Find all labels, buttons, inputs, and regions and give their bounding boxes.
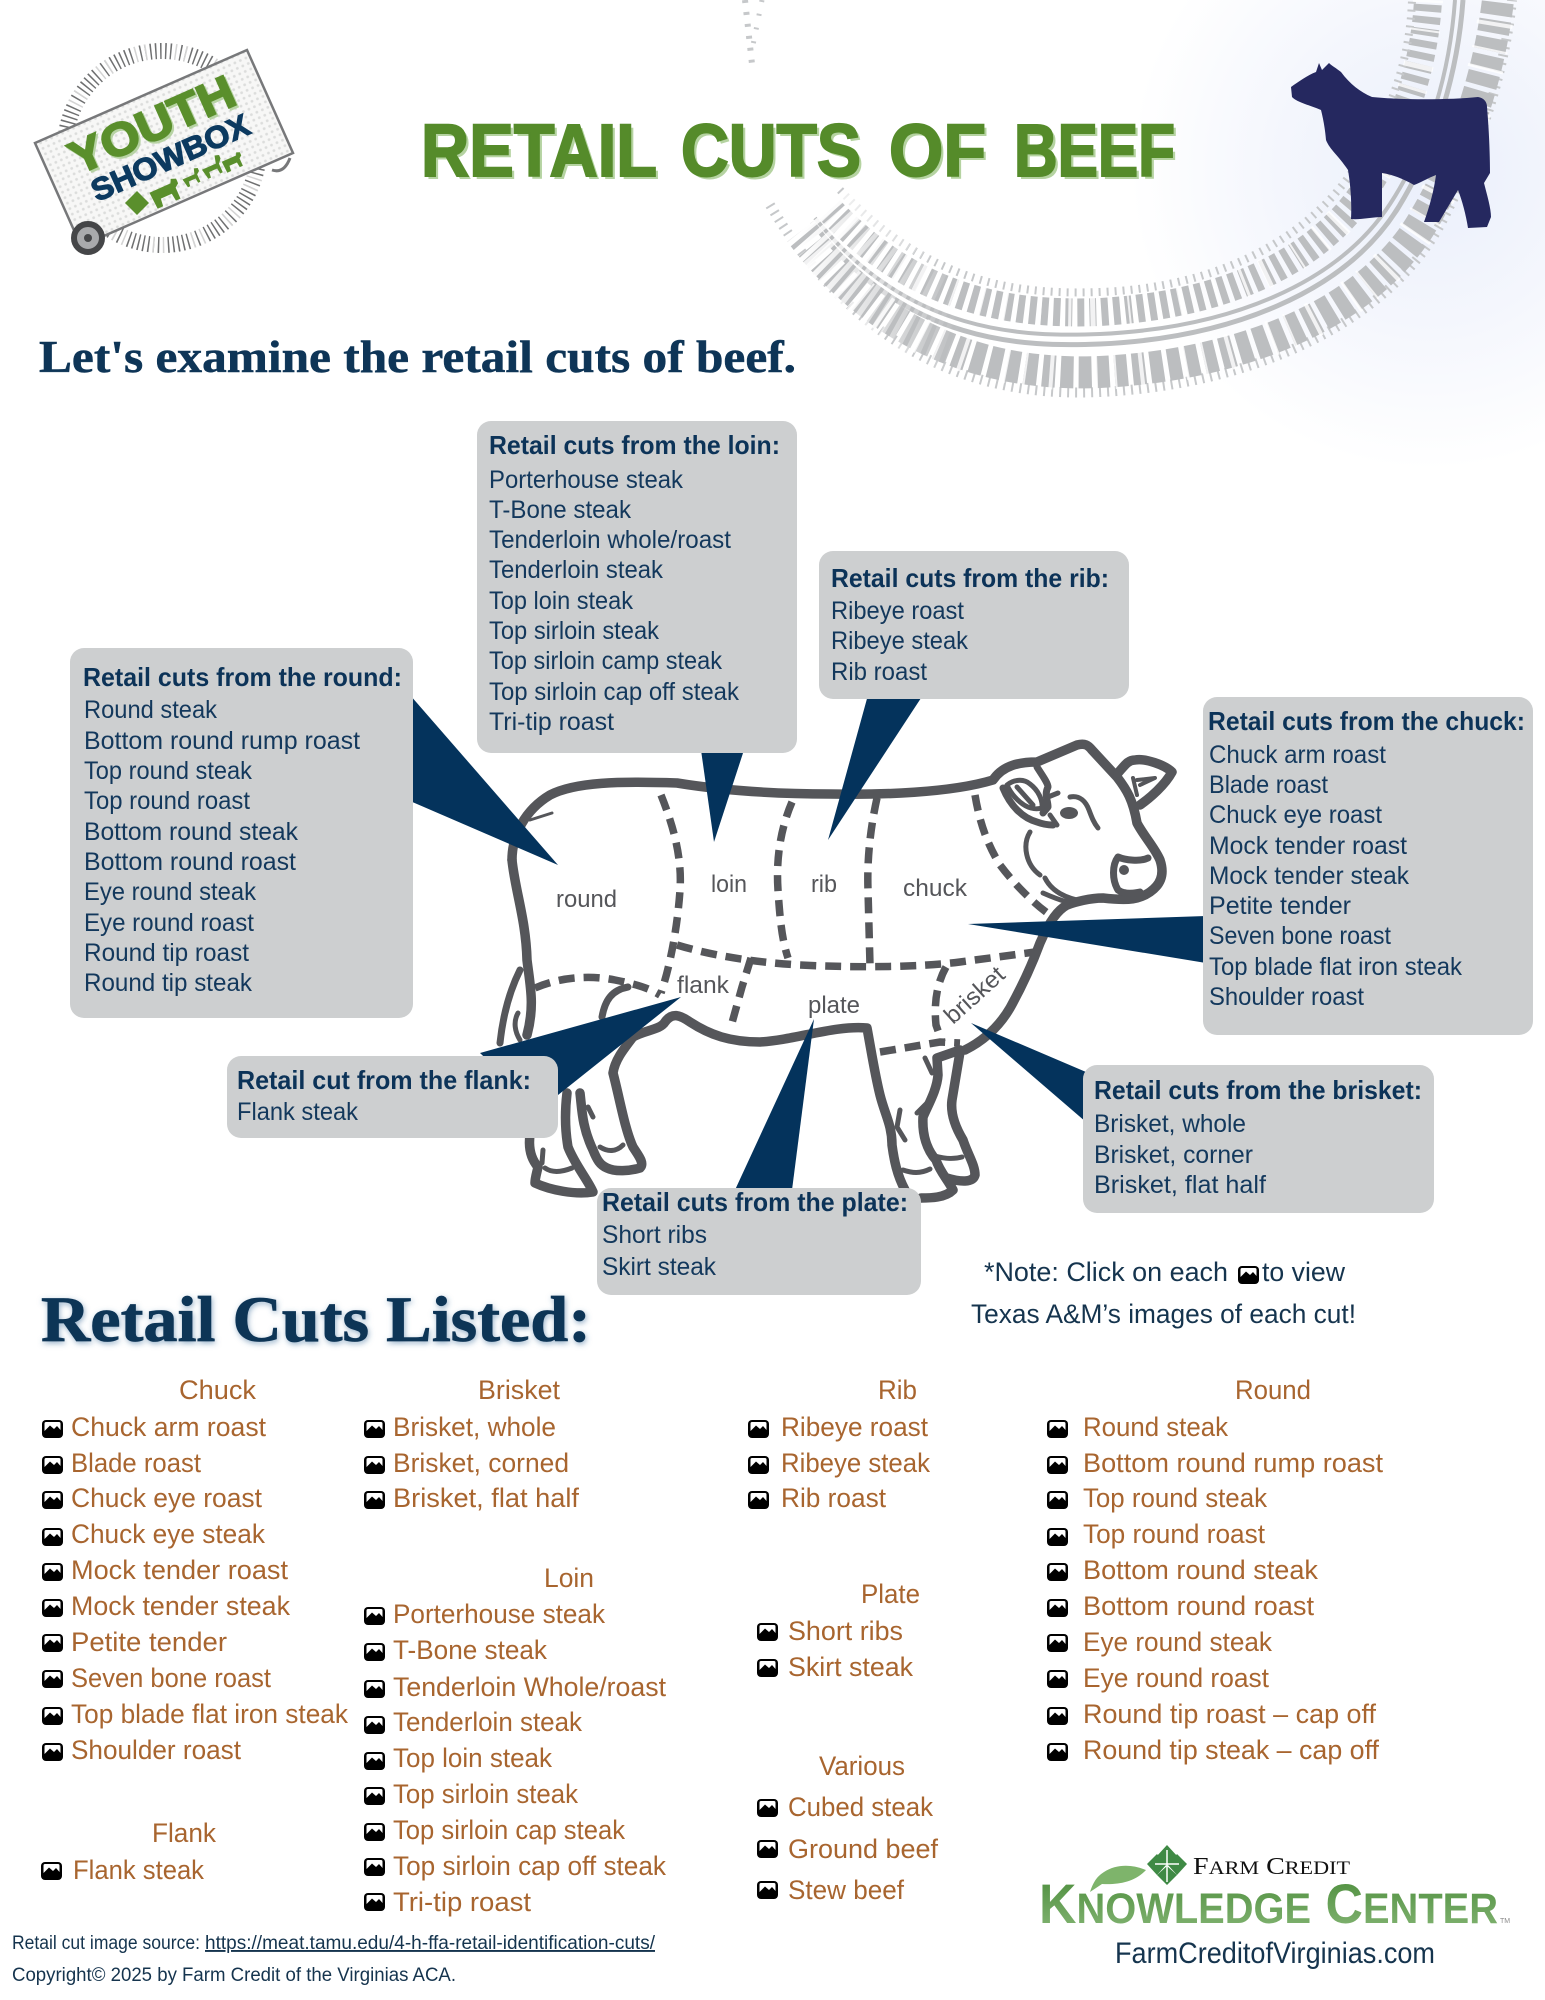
tire track bbox=[745, 0, 1512, 392]
title: OF bbox=[892, 112, 989, 195]
list: Loin: Tenderloin steak bbox=[393, 1707, 582, 1737]
pointer: chuck bbox=[968, 916, 1206, 963]
list: Rib: Ribeye steak bbox=[781, 1448, 930, 1478]
list: Rib bbox=[748, 1375, 930, 1513]
cut labels on the cow bbox=[556, 871, 1011, 1029]
panel: round: Bottom round steak bbox=[84, 818, 298, 846]
panel: loin: Top sirloin steak bbox=[489, 617, 659, 645]
pointer: round bbox=[410, 695, 558, 865]
title: CUTS bbox=[681, 109, 861, 192]
logo: Youth Showbox: SHOWBOX bbox=[86, 107, 255, 208]
pointer: rib bbox=[828, 695, 923, 840]
list: Chuck: Mock tender roast bbox=[71, 1555, 288, 1585]
icon: steer silhouette bbox=[1291, 63, 1491, 228]
logo: Youth Showbox: YOUTH bbox=[63, 67, 245, 186]
list: Round: Round steak bbox=[1083, 1412, 1228, 1442]
list: Chuck: Mock tender steak bbox=[71, 1591, 290, 1621]
list: Brisket: Brisket bbox=[478, 1375, 560, 1405]
panel: chuck: Shoulder roast bbox=[1209, 983, 1364, 1011]
panel: plate bbox=[597, 1187, 921, 1295]
panel: loin bbox=[477, 421, 797, 753]
heading: Retail Cuts Listed: Retail Cuts Listed: bbox=[41, 1284, 591, 1356]
panel: round: Round tip roast bbox=[84, 939, 249, 967]
list: Round: Eye round steak bbox=[1083, 1627, 1272, 1657]
cut labels on the cow: chuck bbox=[903, 875, 968, 902]
list: Chuck: Petite tender bbox=[71, 1627, 227, 1657]
logo: Farm Credit Knowledge Center: FARM CREDIT bbox=[1193, 1854, 1350, 1880]
list: Chuck bbox=[42, 1375, 348, 1765]
footer: source and copyright bbox=[12, 1933, 656, 1986]
logo: Farm Credit Knowledge Center: KNOWLEDGE CENTER bbox=[1039, 1872, 1498, 1935]
panel: loin: Top sirloin camp steak bbox=[489, 647, 722, 675]
panel: rib: Ribeye steak bbox=[831, 627, 968, 655]
title: OF bbox=[889, 109, 986, 192]
cut labels on the cow: rib bbox=[811, 871, 837, 898]
list: Loin: Top sirloin cap off steak bbox=[393, 1851, 666, 1881]
panel: flank: Flank steak bbox=[237, 1098, 358, 1126]
panel: chuck: Top blade flat iron steak bbox=[1209, 953, 1462, 981]
list: Chuck: Chuck bbox=[179, 1375, 257, 1405]
panel: round bbox=[70, 648, 413, 1018]
list: Rib: Rib roast bbox=[781, 1483, 886, 1513]
panel: round: Bottom round rump roast bbox=[84, 727, 360, 755]
cow diagram bbox=[500, 744, 1172, 1198]
panel: rib: Rib roast bbox=[831, 658, 927, 686]
list: Chuck: Chuck eye steak bbox=[71, 1519, 265, 1549]
panel: brisket: Brisket, whole bbox=[1094, 1110, 1246, 1138]
pointer: brisket bbox=[971, 1023, 1086, 1122]
list: Rib: Rib bbox=[878, 1375, 917, 1405]
logo: Farm Credit Knowledge Center: FarmCreditofVirginias.com bbox=[1115, 1937, 1435, 1970]
note bbox=[971, 1257, 1356, 1329]
panel: round: Top round roast bbox=[84, 787, 250, 815]
panel: loin: Porterhouse steak bbox=[489, 466, 683, 494]
logo: Farm Credit Knowledge Center bbox=[1039, 1845, 1510, 1970]
list: Brisket bbox=[364, 1375, 579, 1513]
list: Loin: Top sirloin cap steak bbox=[393, 1815, 625, 1845]
list: Brisket: Brisket, corned bbox=[393, 1448, 569, 1478]
list: Round: Round tip roast – cap off bbox=[1083, 1699, 1376, 1729]
panel: flank bbox=[227, 1056, 558, 1138]
list: Round: Bottom round roast bbox=[1083, 1591, 1314, 1621]
cut labels on the cow: loin bbox=[711, 871, 747, 898]
panel: chuck: Chuck arm roast bbox=[1209, 741, 1386, 769]
list: Round: Bottom round rump roast bbox=[1083, 1448, 1383, 1478]
footer: source and copyright: Copyright© 2025 by Farm Credit of the Virginias ACA. bbox=[12, 1965, 456, 1986]
panel: loin: Tenderloin whole/roast bbox=[489, 526, 731, 554]
panel: round: Eye round steak bbox=[84, 878, 256, 906]
list: Loin: Loin bbox=[544, 1563, 594, 1593]
panel: round: Round tip steak bbox=[84, 969, 252, 997]
pointer: plate bbox=[735, 1019, 814, 1190]
panel: rib: Ribeye roast bbox=[831, 597, 964, 625]
list: Various: Stew beef bbox=[788, 1875, 904, 1905]
panel: loin: Tri-tip roast bbox=[489, 708, 614, 736]
list: Chuck: Seven bone roast bbox=[71, 1663, 271, 1693]
subtitle: Let's examine the retail cuts of beef. bbox=[39, 332, 796, 382]
panel: round: Round steak bbox=[84, 696, 217, 724]
panel: chuck: Mock tender roast bbox=[1209, 832, 1407, 860]
title: BEEF bbox=[1014, 109, 1175, 192]
panel: round: Eye round roast bbox=[84, 909, 254, 937]
logo: Youth Showbox bbox=[35, 50, 293, 252]
list: Round: Top round steak bbox=[1083, 1483, 1267, 1513]
list: Loin: Porterhouse steak bbox=[393, 1599, 605, 1629]
list: Round bbox=[1047, 1375, 1383, 1765]
panel: chuck: Blade roast bbox=[1209, 771, 1328, 799]
panel: loin: Top sirloin cap off steak bbox=[489, 678, 739, 706]
title bbox=[421, 109, 1178, 195]
panel: brisket: Brisket, flat half bbox=[1094, 1171, 1266, 1199]
panel: round: Top round steak bbox=[84, 757, 252, 785]
logo: Farm Credit Knowledge Center: TM bbox=[1500, 1918, 1510, 1925]
panel: round: Retail cuts from the round: bbox=[83, 662, 402, 692]
panel: brisket: Brisket, corner bbox=[1094, 1141, 1253, 1169]
list: Flank: Flank steak bbox=[73, 1855, 204, 1885]
panel: brisket bbox=[1083, 1065, 1434, 1213]
list: Various: Various bbox=[819, 1751, 905, 1781]
list: Loin: Top loin steak bbox=[393, 1743, 552, 1773]
list: Round: Eye round roast bbox=[1083, 1663, 1269, 1693]
panel: chuck: Mock tender steak bbox=[1209, 862, 1409, 890]
cut labels on the cow: round bbox=[556, 886, 617, 913]
list: Loin bbox=[364, 1563, 666, 1917]
list: Various: Cubed steak bbox=[788, 1792, 933, 1822]
list: Loin: Top sirloin steak bbox=[393, 1779, 578, 1809]
list: Brisket: Brisket, flat half bbox=[393, 1483, 579, 1513]
list: Chuck: Shoulder roast bbox=[71, 1735, 241, 1765]
pointer: flank bbox=[480, 997, 681, 1110]
panel: loin: Tenderloin steak bbox=[489, 556, 663, 584]
panel: chuck: Petite tender bbox=[1209, 892, 1351, 920]
cut labels on the cow: brisket bbox=[939, 961, 1011, 1029]
panel: loin: Retail cuts from the loin: bbox=[489, 430, 780, 460]
logo: Youth Showbox: YOUTH bbox=[61, 65, 243, 184]
list: Plate bbox=[757, 1579, 920, 1682]
list: Loin: Tenderloin Whole/roast bbox=[393, 1672, 666, 1702]
list: Various bbox=[757, 1751, 938, 1905]
list: Plate: Skirt steak bbox=[788, 1652, 913, 1682]
list: Plate: Plate bbox=[861, 1579, 920, 1609]
background glow bbox=[1000, 0, 1545, 500]
list: Chuck: Chuck arm roast bbox=[71, 1412, 266, 1442]
panel: plate: Retail cuts from the plate: bbox=[602, 1187, 908, 1217]
list: Round: Bottom round steak bbox=[1083, 1555, 1318, 1585]
panel: flank: Retail cut from the flank: bbox=[237, 1065, 531, 1095]
title: RETAIL bbox=[421, 109, 657, 192]
note: Texas A&M’s images of each cut! bbox=[971, 1299, 1356, 1329]
list: Flank: Flank bbox=[152, 1818, 216, 1848]
panel: plate: Short ribs bbox=[602, 1221, 707, 1249]
panel: brisket: Retail cuts from the brisket: bbox=[1094, 1075, 1422, 1105]
list: Flank bbox=[41, 1818, 216, 1885]
panel: chuck bbox=[1203, 697, 1533, 1035]
panel: chuck: Retail cuts from the chuck: bbox=[1208, 706, 1525, 736]
list: Chuck: Top blade flat iron steak bbox=[71, 1699, 348, 1729]
list: Round: Round bbox=[1235, 1375, 1311, 1405]
list: Brisket: Brisket, whole bbox=[393, 1412, 556, 1442]
title: BEEF bbox=[1017, 112, 1178, 195]
note: to view bbox=[1262, 1257, 1345, 1287]
panel: chuck: Chuck eye roast bbox=[1209, 801, 1382, 829]
list: Loin: T-Bone steak bbox=[393, 1635, 547, 1665]
list: Round: Top round roast bbox=[1083, 1519, 1265, 1549]
list: Various: Ground beef bbox=[788, 1834, 938, 1864]
footer: source and copyright: https://meat.tamu.edu/4-h-ffa-retail-identification-cuts/ bbox=[205, 1933, 656, 1954]
panel: loin: Top loin steak bbox=[489, 587, 633, 615]
list: Round: Round tip steak – cap off bbox=[1083, 1735, 1379, 1765]
list: Loin: Tri-tip roast bbox=[393, 1887, 532, 1917]
cut labels on the cow: plate bbox=[808, 992, 860, 1019]
panel: loin: T-Bone steak bbox=[489, 496, 631, 524]
panel: chuck: Seven bone roast bbox=[1209, 922, 1391, 950]
cut labels on the cow: flank bbox=[677, 972, 730, 999]
list: Chuck: Blade roast bbox=[71, 1448, 201, 1478]
list: Plate: Short ribs bbox=[788, 1616, 903, 1646]
list: Chuck: Chuck eye roast bbox=[71, 1483, 262, 1513]
panel: rib bbox=[819, 551, 1129, 699]
note: *Note: Click on each bbox=[984, 1257, 1228, 1287]
panel: rib: Retail cuts from the rib: bbox=[831, 563, 1109, 593]
panel: round: Bottom round roast bbox=[84, 848, 296, 876]
title: CUTS bbox=[684, 112, 864, 195]
footer: source and copyright: Retail cut image source: bbox=[12, 1933, 200, 1954]
title: RETAIL bbox=[424, 112, 660, 195]
list: Rib: Ribeye roast bbox=[781, 1412, 928, 1442]
pointer: loin bbox=[701, 750, 744, 842]
panel: plate: Skirt steak bbox=[602, 1253, 716, 1281]
